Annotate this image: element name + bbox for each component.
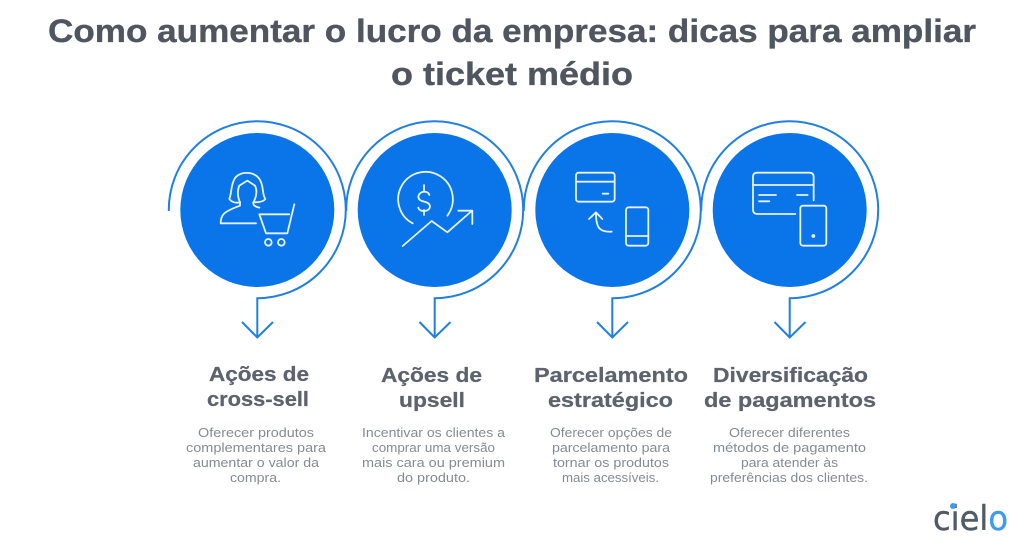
- text block: parcelamento: Oferecer opções de: [550, 426, 672, 440]
- step 2: upsell circle: [346, 121, 523, 337]
- text block: cross-sell: Ações de: [209, 363, 309, 386]
- text block: diversificação: para atender às: [741, 456, 838, 470]
- text block: upsell: do produto.: [397, 471, 470, 485]
- text block: cross-sell: aumentar o valor da: [193, 456, 319, 470]
- text block: parcelamento: estratégico: [548, 389, 673, 412]
- text block: parcelamento: parcelamento para: [552, 441, 670, 455]
- step 4: payment methods circle: [701, 121, 878, 338]
- icon: person with shopping cart: [221, 173, 294, 246]
- text block: upsell: upsell: [399, 389, 465, 412]
- text block: upsell: Ações de: [381, 364, 482, 387]
- text block: cross-sell: [186, 363, 326, 485]
- icon: card and phone: [576, 173, 648, 246]
- step 1: cross-sell circle: [169, 121, 346, 338]
- blue disc 4: [713, 133, 867, 287]
- blue disc 2: [358, 133, 512, 287]
- step 3: installments circle: [524, 121, 701, 338]
- title: o ticket médio: [391, 56, 633, 92]
- text block: parcelamento: mais acessíveis.: [562, 471, 659, 485]
- text block: diversificação: métodos de pagamento: [713, 441, 866, 455]
- text block: diversificação: Diversificação: [713, 364, 868, 387]
- ring with arrow 4: [701, 121, 878, 338]
- title: Como aumentar o lucro da empresa: dicas para ampliar: [48, 13, 976, 49]
- blue disc 3: [535, 133, 689, 287]
- title: [48, 13, 976, 92]
- text block: cross-sell: compra.: [230, 471, 281, 485]
- text block: upsell: mais cara ou premium: [362, 456, 505, 470]
- ring with arrow 1: [169, 121, 346, 338]
- ring with arrow 3: [524, 121, 701, 338]
- icon: dollar coin with rising arrow: [398, 172, 472, 246]
- text block: parcelamento: [534, 364, 688, 485]
- text block: cross-sell: complementares para: [186, 441, 326, 455]
- text block: upsell: Incentivar os clientes a: [362, 426, 505, 440]
- blue disc 1: [180, 133, 334, 287]
- text block: upsell: [362, 364, 505, 485]
- ring with arrow 2: [346, 121, 523, 337]
- text block: cross-sell: Oferecer produtos: [198, 426, 314, 440]
- text block: diversificação: Oferecer diferentes: [729, 426, 850, 440]
- text block: upsell: comprar uma versão: [372, 441, 495, 455]
- icon: large card and tablet: [753, 173, 826, 246]
- text block: cross-sell: cross-sell: [207, 388, 309, 411]
- text block: diversificação: de pagamentos: [704, 389, 876, 412]
- text block: diversificação: [704, 364, 876, 485]
- text block: parcelamento: tornar os produtos: [553, 456, 669, 470]
- logo: cielo: cielo: [933, 499, 1008, 539]
- text block: parcelamento: Parcelamento: [534, 364, 688, 387]
- text block: diversificação: preferências dos clientes.: [710, 471, 868, 485]
